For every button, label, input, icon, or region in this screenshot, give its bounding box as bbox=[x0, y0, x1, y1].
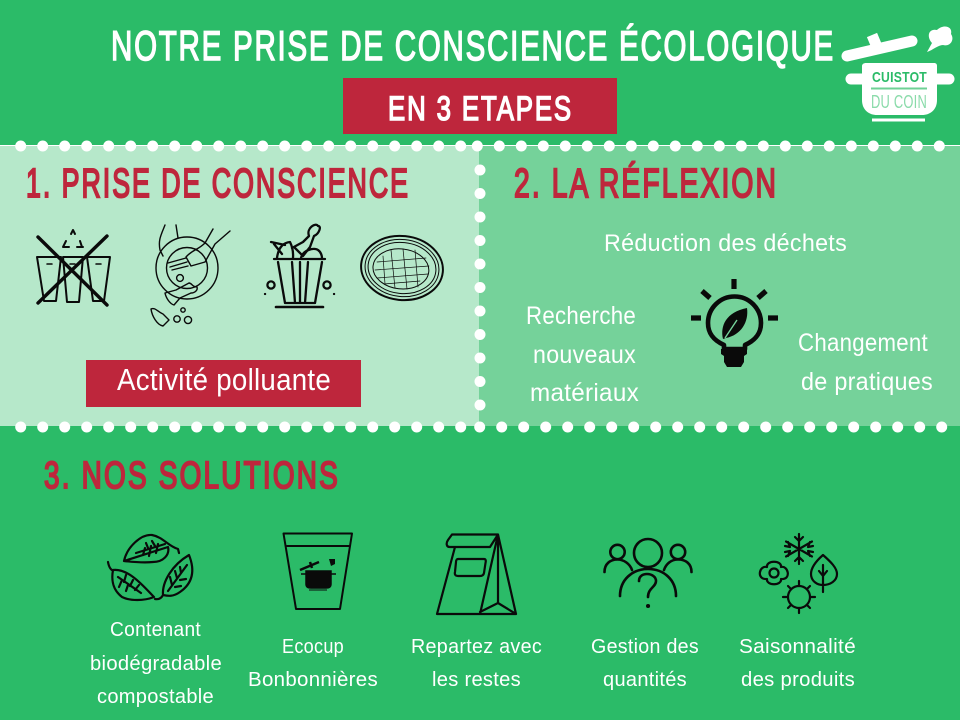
text: contenant bbox=[90, 618, 222, 708]
text: gestion des: quantités bbox=[603, 668, 687, 691]
text: saisonnalité: des produits bbox=[741, 668, 855, 691]
text: ecocup bbox=[248, 635, 378, 691]
text: changement de pratiques bbox=[798, 329, 933, 396]
logo: cuistot du coin: DU COIN bbox=[871, 92, 927, 112]
text: gestion des bbox=[591, 635, 699, 691]
heading: prise de conscience: 1. PRISE DE CONSCIENCE bbox=[26, 160, 410, 206]
solution: saisonnalité des produits bbox=[739, 534, 856, 691]
icon: eco light bulb bbox=[691, 279, 778, 367]
icon: overflowing bin bbox=[265, 225, 334, 307]
text: saisonnalité: Saisonnalité bbox=[739, 635, 856, 658]
solution: contenant biodégradable bbox=[90, 535, 222, 708]
text: contenant: biodégradable bbox=[90, 652, 222, 675]
heading: la réflexion: 2. LA RÉFLEXION bbox=[514, 160, 778, 206]
callout: activité polluante bbox=[86, 360, 361, 407]
text: contenant: compostable bbox=[97, 685, 214, 708]
icon: paper bag bbox=[437, 534, 516, 614]
banner: en 3 etapes: EN 3 ETAPES bbox=[388, 90, 573, 128]
text: recherche nouveaux matériaux: nouveaux bbox=[533, 341, 636, 369]
text: recherche nouveaux matériaux bbox=[526, 302, 639, 407]
text: repartez avec: les restes bbox=[432, 668, 521, 691]
logo: cuistot du coin bbox=[847, 27, 952, 120]
text: changement de pratiques: de pratiques bbox=[801, 368, 933, 396]
text: ecocup: Ecocup bbox=[282, 635, 344, 658]
text: changement de pratiques: Changement bbox=[798, 329, 928, 357]
icon: people with question mark bbox=[604, 539, 692, 606]
text: recherche nouveaux matériaux: matériaux bbox=[530, 379, 639, 407]
text: recherche nouveaux matériaux: Recherche bbox=[526, 302, 636, 330]
icon: plate with leftovers bbox=[151, 225, 230, 326]
icon: branded cup bbox=[284, 534, 352, 609]
banner: en 3 etapes bbox=[343, 78, 617, 134]
icon: compostable tray bbox=[358, 232, 446, 304]
logo: cuistot du coin: CUISTOT bbox=[872, 69, 927, 86]
callout: activité polluante: Activité polluante bbox=[117, 362, 331, 397]
icon: seasons bbox=[760, 534, 837, 613]
text: contenant: Contenant bbox=[110, 618, 201, 641]
text: réduction des déchets: Réduction des déchets bbox=[604, 230, 847, 257]
solution: gestion des quantités bbox=[591, 539, 699, 691]
heading: nos solutions: 3. NOS SOLUTIONS bbox=[44, 455, 340, 497]
text: repartez avec: Repartez avec bbox=[411, 635, 542, 658]
solution: repartez avec les restes bbox=[411, 534, 542, 691]
text: ecocup: Bonbonnières bbox=[248, 668, 378, 691]
text: repartez avec bbox=[411, 635, 542, 691]
icon: three leaves bbox=[108, 535, 192, 600]
icon: crossed cups bbox=[37, 230, 110, 305]
panel: la réflexion bbox=[479, 146, 960, 426]
text: gestion des: Gestion des bbox=[591, 635, 699, 658]
solution: ecocup bbox=[248, 534, 378, 691]
text: saisonnalité bbox=[739, 635, 856, 691]
panel: prise de conscience bbox=[0, 146, 479, 426]
